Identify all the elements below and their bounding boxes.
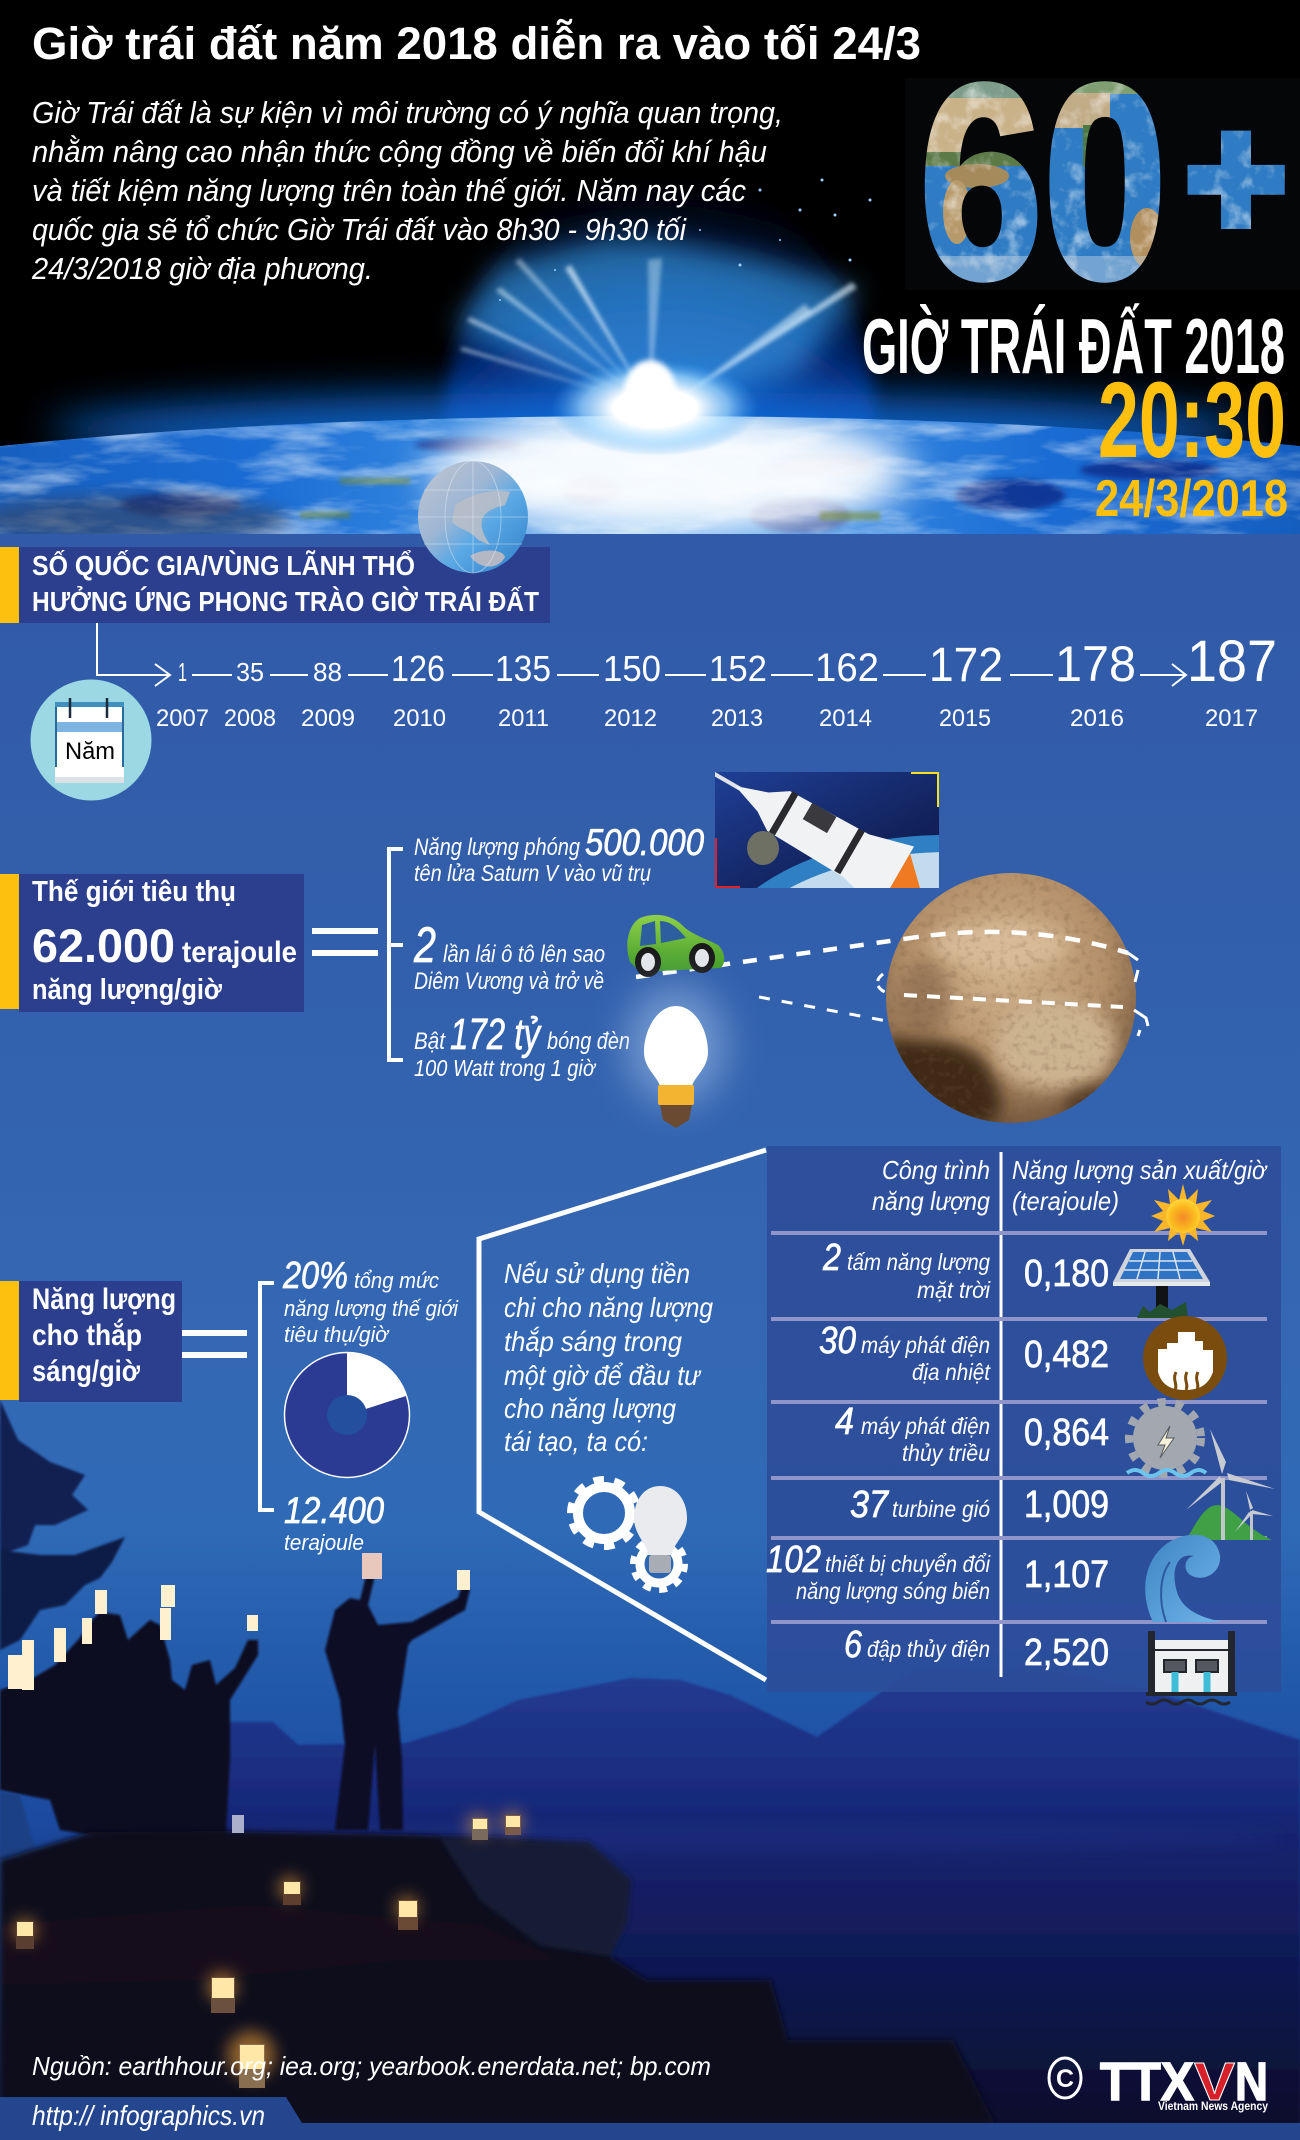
row: solar panels: 0,180 [1024, 1253, 1109, 1295]
people silhouettes [0, 1560, 470, 1920]
row: solar panels: 2 [822, 1237, 841, 1279]
icon: hydro dam [1146, 1631, 1237, 1704]
row: tidal: 0,864 [1024, 1412, 1109, 1454]
renewable text: chi cho năng lượng [504, 1292, 713, 1323]
timeline: years: 2008 [224, 705, 276, 732]
comparison: light bulbs: 100 Watt trong 1 giờ [414, 1055, 597, 1081]
icon: wind turbines [1186, 1429, 1275, 1540]
intro paragraph [31, 95, 783, 286]
table headers: Công trình [882, 1155, 990, 1185]
icon: gears and bulb [570, 1480, 687, 1590]
renewable text: thắp sáng trong [504, 1326, 682, 1357]
equals sign [312, 931, 378, 953]
lighting total: 12.400 [284, 1490, 384, 1531]
row: tidal: 4 [835, 1401, 854, 1443]
section: countries heading: SỐ QUỐC GIA/VÙNG LÃNH THỔ [32, 549, 415, 581]
row: wave [766, 1539, 1109, 1604]
row: tidal [835, 1401, 1109, 1466]
agency logo [1049, 2052, 1268, 2113]
row: wave: thiết bị chuyển đổi [825, 1551, 991, 1577]
comparison: drive to Pluto: lần lái ô tô lên sao [443, 941, 605, 968]
comparison: Saturn V: tên lửa Saturn V vào vũ trụ [414, 860, 651, 886]
timeline: connectors [192, 664, 1186, 686]
timeline: yearly figures: 35 [236, 657, 264, 687]
intro paragraph: Giờ Trái đất là sự kiện vì môi trường có ý nghĩa quan trọng, [32, 95, 783, 130]
intro paragraph: và tiết kiệm năng lượng trên toàn thế giới. Năm nay các [32, 173, 746, 208]
panel: lighting energy: sáng/giờ [32, 1355, 141, 1388]
60+ logo: 60 [919, 28, 1167, 336]
timeline: yearly figures: 162 [815, 646, 879, 690]
bracket [389, 849, 403, 1060]
share label: tổng mức [354, 1268, 439, 1293]
timeline: years: 2014 [819, 705, 872, 732]
row: wind [850, 1484, 1109, 1526]
panel: renewable energy table [766, 1146, 1281, 1692]
share label: 20% [282, 1255, 348, 1297]
60+ logo: + [1186, 82, 1286, 274]
timeline: yearly figures: 152 [709, 648, 767, 689]
icon: globe [418, 461, 528, 573]
source: Nguồn: earthhour.org; iea.org; yearbook.enerdata.net; bp.com [32, 2051, 711, 2081]
timeline: years [156, 705, 1258, 732]
timeline: yearly figures: 172 [929, 639, 1003, 692]
timeline: yearly figures: 135 [495, 648, 551, 689]
person: group [0, 1612, 258, 1880]
icon: solar panel [1113, 1249, 1210, 1318]
share label [282, 1255, 459, 1347]
icon: calendar [30, 680, 152, 800]
renewable text: một giờ để đầu tư [504, 1360, 702, 1391]
row: geothermal: địa nhiệt [912, 1359, 991, 1385]
panel: world consumption: năng lượng/giờ [32, 974, 222, 1006]
main blue background [0, 534, 1300, 2140]
icon: Pluto planet [880, 873, 1136, 1130]
table headers: năng lượng [872, 1186, 990, 1216]
timeline: yearly figures [178, 629, 1277, 694]
row: geothermal: máy phát điện [861, 1332, 990, 1358]
table headers [872, 1155, 1268, 1216]
row: hydro: 6 [844, 1624, 863, 1666]
footer strip [0, 2097, 1300, 2140]
comparison: light bulbs: Bật [414, 1028, 446, 1055]
row: wave: 102 [766, 1539, 821, 1581]
share label: tiêu thụ/giờ [284, 1322, 390, 1347]
row: geothermal [819, 1320, 1109, 1385]
intro paragraph: nhằm nâng cao nhận thức cộng đồng về biến đổi khí hậu [32, 134, 767, 169]
candles [8, 1553, 523, 2088]
image: Saturn V rocket [715, 772, 939, 888]
panel: world consumption: 62.000 [32, 919, 175, 972]
comparison: light bulbs: 172 tỷ [450, 1010, 542, 1059]
row: wind: 37 [850, 1484, 890, 1526]
timeline: yearly figures: 178 [1055, 636, 1136, 692]
row: solar panels: mặt trời [917, 1277, 991, 1303]
comparison: Saturn V: Năng lượng phóng [414, 834, 581, 861]
agency logo: N [1235, 2052, 1268, 2112]
section: countries heading: HƯỞNG ỨNG PHONG TRÀO GIỜ TRÁI ĐẤT [32, 585, 539, 617]
title: Giờ trái đất năm 2018 diễn ra vào tối 24/3 [32, 18, 921, 69]
icon: green car [627, 915, 724, 977]
panel: world consumption [0, 874, 304, 1012]
timeline: years: 2013 [711, 705, 763, 732]
timeline: years: 2017 [1205, 705, 1258, 732]
icon: sun [1151, 1184, 1215, 1246]
intro paragraph: quốc gia sẽ tổ chức Giờ Trái đất vào 8h30 - 9h30 tối [32, 212, 687, 247]
table headers: (terajoule) [1012, 1186, 1119, 1216]
row: hydro: đập thủy điện [867, 1636, 990, 1662]
night landscape photo [224, 1666, 1300, 2123]
icon: geothermal [1143, 1316, 1227, 1400]
timeline: years: 2011 [498, 705, 549, 732]
timeline: years: 2016 [1070, 705, 1124, 732]
intro paragraph: 24/3/2018 giờ địa phương. [31, 251, 373, 286]
bracket [260, 1283, 274, 1510]
row: hydro: 2,520 [1024, 1632, 1109, 1674]
person: standing figure [325, 1560, 470, 1830]
funnel outline [479, 1150, 766, 1680]
timeline: yearly figures: 1 [178, 657, 187, 687]
icon: light bulb [626, 985, 726, 1128]
timeline: yearly figures: 88 [313, 657, 342, 687]
renewable text: Nếu sử dụng tiền [504, 1258, 690, 1289]
row: geothermal: 0,482 [1024, 1334, 1109, 1376]
panel: lighting energy: Năng lượng [32, 1283, 176, 1316]
timeline arrow [97, 623, 170, 686]
row: tidal: thủy triều [902, 1440, 990, 1466]
share label: năng lượng thế giới [284, 1296, 459, 1321]
agency logo: V [1194, 2052, 1235, 2112]
panel: lighting energy: cho thắp [32, 1318, 142, 1352]
row: geothermal: 30 [819, 1320, 856, 1362]
agency logo: Vietnam News Agency [1158, 2099, 1268, 2113]
row: wave: 1,107 [1024, 1554, 1109, 1596]
comparison: light bulbs [414, 1010, 630, 1081]
row: wind: turbine gió [892, 1496, 990, 1522]
comparison: drive to Pluto: Diêm Vương và trở về [414, 968, 604, 995]
equals sign [182, 1333, 247, 1355]
row: wave: năng lượng sóng biển [796, 1578, 990, 1604]
timeline: years: 2010 [393, 705, 446, 732]
renewable text [504, 1258, 713, 1457]
website: http:// infographics.vn [32, 2100, 265, 2131]
section: countries heading [0, 547, 550, 623]
icon: calendar: Năm [65, 738, 115, 765]
panel: world consumption: Thế giới tiêu thụ [32, 876, 236, 908]
panel: world consumption: terajoule [182, 936, 297, 969]
panel: lighting energy [0, 1281, 182, 1402]
comparison: drive to Pluto [413, 917, 605, 995]
agency logo: C [1056, 2065, 1074, 2093]
comparison: Saturn V: 500.000 [585, 822, 704, 863]
tree silhouette [0, 1400, 125, 1650]
comparison: Saturn V [414, 822, 704, 886]
timeline: years: 2012 [604, 705, 657, 732]
timeline: yearly figures: 126 [391, 648, 445, 689]
row: tidal: máy phát điện [861, 1413, 990, 1439]
header background [0, 178, 1300, 534]
lighting total: terajoule [284, 1530, 364, 1555]
row: hydro [844, 1624, 1109, 1674]
timeline: yearly figures: 187 [1187, 629, 1277, 694]
agency logo: TTX [1100, 2052, 1194, 2112]
timeline: yearly figures: 150 [603, 648, 661, 689]
renewable text: cho năng lượng [504, 1393, 676, 1424]
comparison: drive to Pluto: 2 [413, 917, 436, 973]
timeline: years: 2015 [939, 705, 991, 732]
timeline: years: 2009 [301, 705, 355, 732]
cliff and ground [0, 1831, 995, 2123]
comparison: light bulbs: bóng đèn [547, 1028, 630, 1055]
row: wind: 1,009 [1024, 1484, 1109, 1526]
icon: wave [1145, 1535, 1222, 1622]
person: jeans [0, 1792, 43, 1920]
pie chart [284, 1352, 410, 1478]
table headers: Năng lượng sản xuất/giờ [1012, 1155, 1268, 1185]
row: solar panels [822, 1237, 1109, 1303]
dashed trajectory lines [636, 932, 1148, 1036]
row: solar panels: tấm năng lượng [847, 1249, 990, 1275]
renewable text: tái tạo, ta có: [504, 1426, 648, 1457]
lighting total [284, 1490, 384, 1555]
timeline: years: 2007 [156, 705, 209, 732]
icon: tidal generator [1127, 1402, 1206, 1476]
